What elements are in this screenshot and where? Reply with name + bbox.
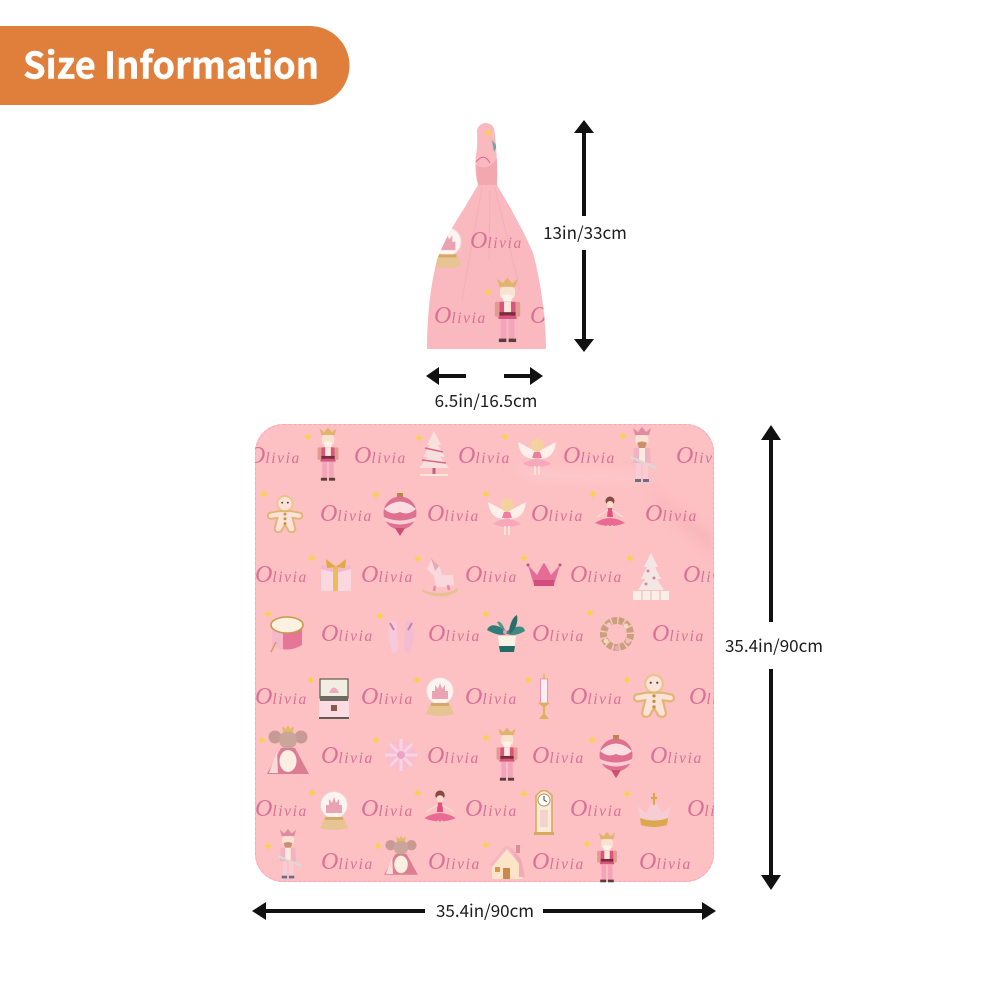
icon: potted plant (487, 615, 525, 652)
label: hat height: 13in/33cm (543, 219, 627, 244)
name pattern: Olivia (650, 743, 703, 769)
name pattern: Olivia (255, 796, 308, 822)
arrow: hat width (426, 367, 543, 385)
name pattern: Olivia (652, 621, 705, 647)
icon: ballet shoes (388, 621, 414, 653)
icon: nutcracker with sword (630, 427, 657, 482)
icon: rocking horse (422, 558, 458, 596)
name pattern: Olivia (465, 796, 518, 822)
name pattern: Olivia (639, 849, 692, 875)
arrow: blanket height (761, 425, 781, 890)
name pattern: Olivia (321, 849, 374, 875)
title banner: Size Information (23, 38, 319, 90)
icon: mouse king (267, 725, 309, 774)
name pattern: Olivia (458, 443, 511, 469)
icon: hat nutcracker (495, 278, 520, 342)
name pattern: Olivia (361, 796, 414, 822)
name pattern: Olivia (428, 849, 481, 875)
name pattern: Olivia (563, 443, 616, 469)
name pattern (248, 443, 742, 875)
icon: nutcracker (497, 727, 517, 781)
icon: hat star (484, 288, 492, 296)
blanket fabric (255, 424, 714, 882)
icon: ornament (384, 493, 416, 536)
name pattern: Olivia (532, 621, 585, 647)
icon: wreath (604, 620, 630, 650)
icon: music box (319, 679, 349, 719)
panel: swaddle blanket (248, 424, 742, 882)
name pattern: Olivia (321, 743, 374, 769)
name pattern: Olivia (320, 501, 373, 527)
icon: white tree with gifts (633, 553, 669, 600)
name pattern: Olivia (248, 443, 301, 469)
icon: gold crown (637, 793, 671, 827)
icon: snow globe (426, 678, 454, 716)
icon: gingerbread house (490, 845, 525, 879)
name pattern: Olivia (570, 796, 623, 822)
name pattern: Olivia (683, 562, 736, 588)
icon pattern (267, 427, 674, 882)
name pattern: Olivia (645, 501, 698, 527)
arrow: blanket width (252, 902, 716, 920)
icon: nutcracker (597, 832, 617, 882)
icon: snow globe (320, 792, 348, 830)
name pattern: Olivia (321, 621, 374, 647)
icon: ballerina (424, 790, 456, 837)
icon: ballerina (595, 496, 625, 541)
name pattern: Olivia (676, 443, 729, 469)
icon: pink tree (419, 431, 449, 476)
text: hat name right: Olivia (530, 303, 583, 329)
name pattern: Olivia (570, 684, 623, 710)
icon: snowflake (385, 739, 417, 771)
icon: fairy (488, 498, 526, 535)
name pattern: Olivia (427, 501, 480, 527)
icon: gift (321, 559, 351, 591)
icon: hat star and tip decoration (484, 128, 497, 152)
panel: knotted hat (427, 123, 546, 349)
name pattern: Olivia (570, 562, 623, 588)
name pattern: Olivia (428, 621, 481, 647)
arrow: hat height (574, 120, 594, 352)
icon: ornament (600, 735, 632, 778)
blanket stitched edge (256, 424, 714, 882)
name pattern: Olivia (687, 796, 740, 822)
name pattern: Olivia (427, 743, 480, 769)
icon: nutcracker (318, 427, 338, 481)
icon: drum (271, 617, 303, 652)
name pattern: Olivia (465, 562, 518, 588)
icon: mouse (384, 836, 418, 875)
icon: gingerbread man (634, 674, 674, 717)
icon: nutcracker with sword (277, 829, 302, 878)
name pattern: Olivia (465, 684, 518, 710)
name pattern: Olivia (361, 562, 414, 588)
name pattern: Olivia (361, 684, 414, 710)
name pattern: Olivia (531, 501, 584, 527)
icon: clock (534, 790, 554, 835)
icon: fairy (518, 438, 556, 475)
label: hat width: 6.5in/16.5cm (435, 387, 537, 412)
name pattern: Olivia (255, 684, 308, 710)
name pattern: Olivia (532, 743, 585, 769)
fabric fold shading (698, 534, 706, 539)
icon: hat snow globe (436, 228, 462, 268)
name pattern: Olivia (689, 684, 742, 710)
gold star pattern (258, 432, 634, 850)
label: blanket width: 35.4in/90cm (436, 897, 534, 922)
label: blanket height: 35.4in/90cm (725, 632, 823, 657)
icon: candle (538, 673, 550, 719)
text: hat name lower: Olivia (434, 303, 487, 329)
icon: gingerbread man (268, 495, 302, 532)
title banner (0, 26, 350, 105)
name pattern: Olivia (354, 443, 407, 469)
text: hat name upper: Olivia (470, 228, 523, 254)
name pattern: Olivia (532, 849, 585, 875)
name pattern: Olivia (255, 562, 308, 588)
icon: crown (526, 560, 562, 586)
